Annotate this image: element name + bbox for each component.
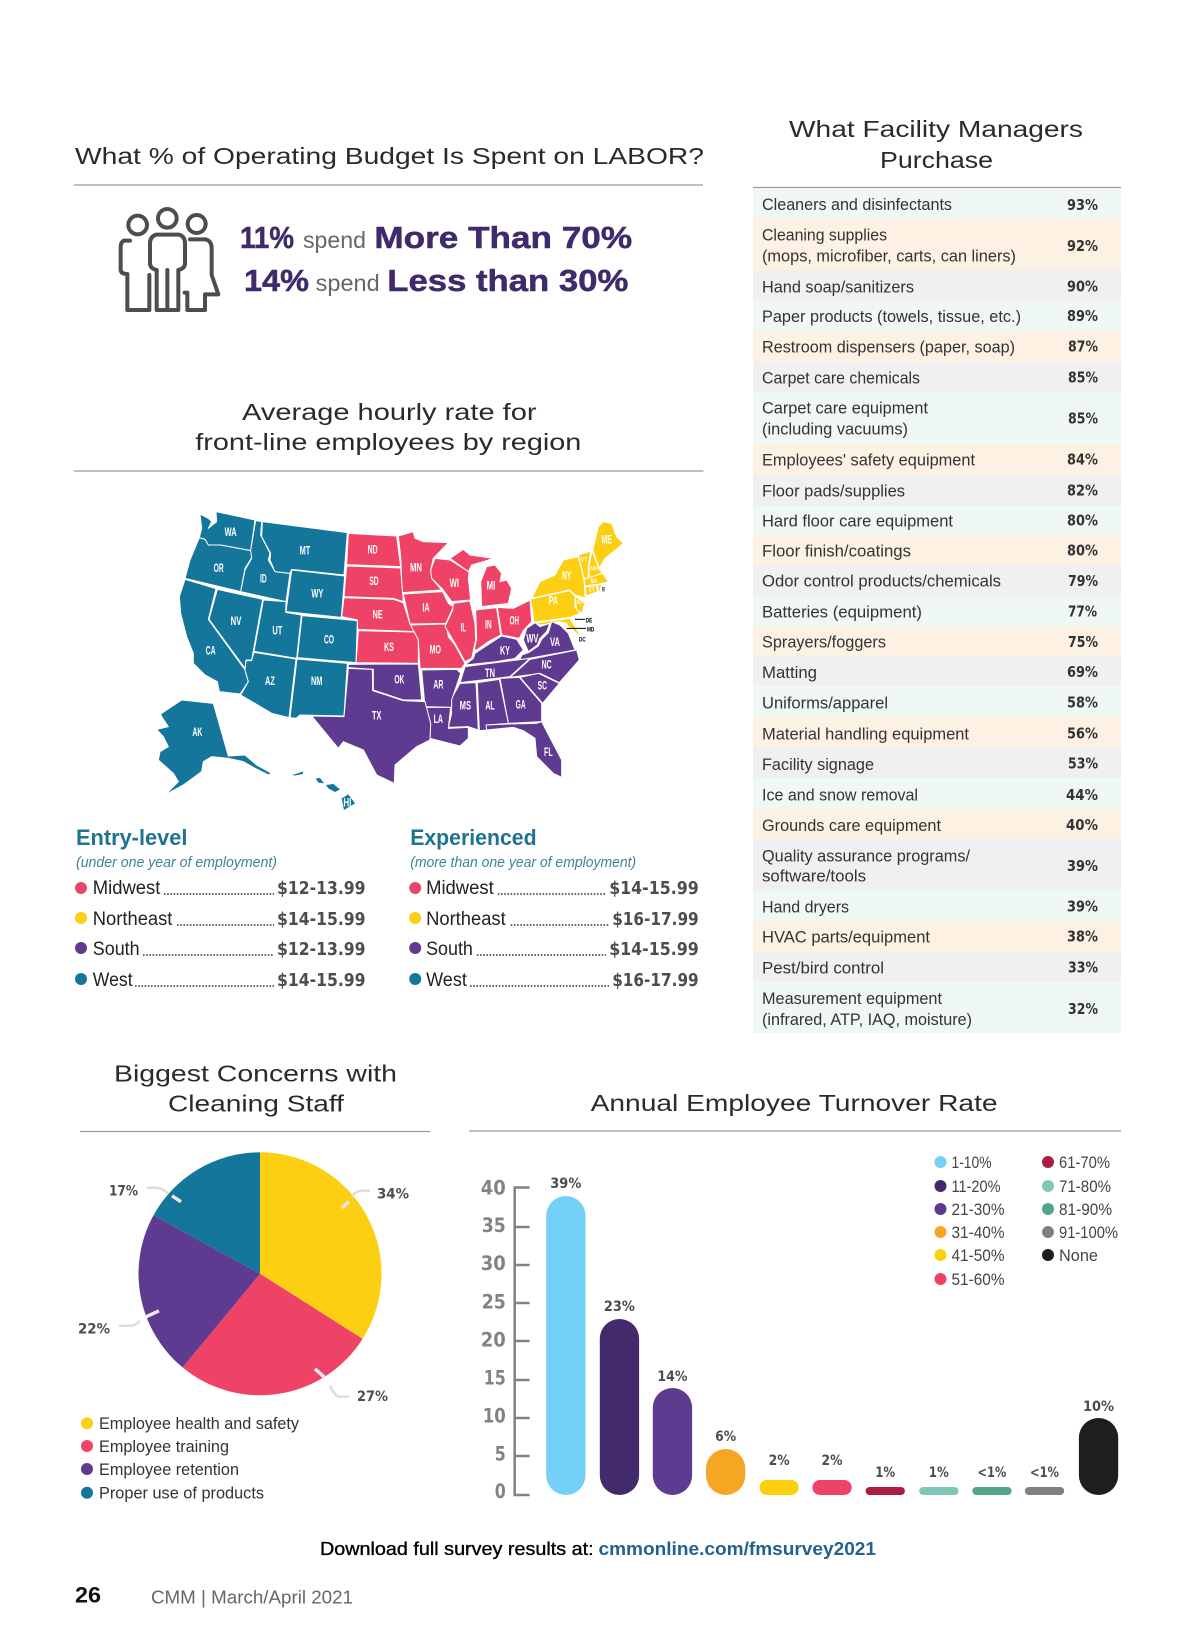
legend: turnover: 71-80%	[1059, 1177, 1111, 1196]
panel: experienced pay: $16-17.99	[612, 909, 699, 930]
download line: Download full survey results at:	[320, 1539, 594, 1559]
row: odor control: Odor control products/chemicals	[762, 572, 1001, 590]
download line	[320, 1539, 876, 1559]
state abbreviations: KS	[384, 640, 394, 654]
row: carpet chemicals: Carpet care chemicals	[762, 370, 920, 388]
row: quality assurance	[753, 839, 1121, 891]
bar: 11-20 percent: 23%	[604, 1299, 635, 1315]
state abbreviations: OH	[510, 613, 519, 627]
row: odor control	[753, 565, 1121, 596]
state abbreviations: GA	[516, 698, 526, 712]
state abbreviations: TX	[372, 708, 381, 722]
callout: 17 percent: 17%	[109, 1183, 138, 1199]
pie chart: concerns	[78, 1152, 409, 1405]
row: carpet equipment: 85%	[1068, 410, 1098, 428]
state abbreviations: CA	[206, 643, 216, 657]
legend: turnover: 41-50%	[952, 1246, 1004, 1265]
state abbreviations: NY	[562, 568, 571, 582]
panel: entry-level pay: South	[93, 939, 140, 960]
legend: turnover: None	[1059, 1246, 1098, 1265]
row: cleaners	[753, 188, 1121, 218]
row: matting	[753, 656, 1121, 686]
panel: experienced pay: South	[426, 939, 473, 960]
row: carpet equipment: Carpet care equipment	[762, 400, 928, 418]
row: batteries	[753, 596, 1121, 626]
row: floor finish	[753, 535, 1121, 565]
state abbreviations: VT	[581, 556, 587, 563]
row: sprayers: 75%	[1068, 633, 1098, 651]
mid-Atlantic callouts	[567, 587, 605, 644]
state abbreviations: NC	[542, 658, 552, 672]
state abbreviations: TN	[485, 666, 495, 680]
state abbreviations: WV	[526, 632, 538, 646]
y axis: 5	[495, 1442, 506, 1466]
heading: labor budget: What % of Operating Budget Is Spent on LABOR?	[75, 143, 704, 169]
panel: experienced pay: $14-15.99	[609, 878, 699, 899]
state abbreviations: ND	[368, 543, 378, 557]
row: cleaning supplies	[753, 218, 1121, 270]
region: Midwest	[342, 532, 532, 668]
row: hand dryers: 39%	[1067, 898, 1098, 916]
state abbreviations: NJ	[577, 599, 582, 606]
row: uniforms	[753, 686, 1121, 717]
row: ice and snow	[753, 778, 1121, 809]
state abbreviations: IA	[422, 601, 430, 615]
row: sprayers: Sprayers/foggers	[762, 634, 886, 652]
row: signage	[753, 747, 1121, 778]
state abbreviations: MT	[300, 543, 311, 557]
row: carpet equipment: (including vacuums)	[762, 420, 908, 438]
bar: 81-90 percent	[972, 1465, 1012, 1495]
row: cleaners: Cleaners and disinfectants	[762, 196, 952, 214]
row: hand soap: 90%	[1067, 278, 1098, 296]
y axis: 10	[483, 1404, 506, 1428]
heading: what facility managers purchase: Purchase	[880, 147, 993, 173]
row: quality assurance: Quality assurance programs/	[762, 848, 970, 866]
row: hard floor: Hard floor care equipment	[762, 512, 953, 530]
row: matting: 69%	[1067, 663, 1098, 681]
row: grounds care: 40%	[1066, 816, 1098, 834]
state abbreviations: WA	[225, 525, 237, 539]
y axis: 0	[495, 1480, 506, 1503]
legend: turnover: 11-20%	[952, 1177, 1000, 1196]
row: cleaners: 93%	[1067, 196, 1098, 214]
row: signage: 53%	[1068, 754, 1098, 772]
callout: 22 percent	[78, 1311, 159, 1337]
row: pest control: Pest/bird control	[762, 960, 884, 978]
panel: experienced pay: Experienced	[410, 825, 537, 850]
heading: average hourly rate: Average hourly rate for	[242, 399, 537, 425]
panel: entry-level pay: (under one year of employment)	[76, 855, 277, 871]
region: Northeast	[531, 522, 623, 635]
region: West	[157, 512, 357, 810]
legend: concerns: Employee health and safety	[99, 1414, 299, 1433]
bar: 21-30 percent	[653, 1369, 692, 1495]
row: hard floor: 80%	[1067, 512, 1098, 530]
row: signage: Facility signage	[762, 756, 874, 774]
state abbreviations: PA	[549, 593, 558, 607]
heading: biggest concerns: Biggest Concerns with	[114, 1060, 397, 1086]
state abbreviations: AR	[433, 677, 444, 691]
callout: 27 percent	[315, 1369, 388, 1405]
row: hand dryers	[753, 891, 1121, 921]
bar: 91-100 percent: <1%	[1030, 1465, 1059, 1481]
callout: 34 percent: 34%	[377, 1186, 409, 1202]
state abbreviations: LA	[434, 712, 443, 726]
row: hand dryers: Hand dryers	[762, 898, 849, 916]
row: floor finish: 80%	[1067, 542, 1098, 560]
callout: 27 percent: 27%	[357, 1389, 388, 1405]
row: batteries: 77%	[1068, 602, 1097, 620]
legend: concerns: Proper use of products	[99, 1484, 264, 1502]
row: ice and snow: 44%	[1066, 786, 1098, 804]
state abbreviations: VA	[550, 635, 560, 649]
panel: entry-level pay: Entry-level	[76, 825, 187, 850]
row: carpet equipment	[753, 393, 1121, 444]
bar: 61-70 percent	[866, 1465, 905, 1495]
row: HVAC: 38%	[1067, 928, 1098, 946]
heading: biggest concerns	[80, 1060, 430, 1132]
panel: entry-level pay: West	[93, 970, 133, 991]
state abbreviations: UT	[272, 623, 283, 637]
state abbreviations: NH	[590, 566, 598, 573]
panel: experienced pay: Midwest	[426, 878, 494, 899]
state abbreviations: HI	[343, 796, 351, 810]
state abbreviations: FL	[544, 745, 553, 759]
state abbreviations: IL	[461, 621, 466, 635]
row: odor control: 79%	[1068, 572, 1098, 590]
panel: entry-level pay: $12-13.99	[277, 878, 366, 899]
legend: turnover: 91-100%	[1059, 1223, 1118, 1242]
row: restroom dispensers: Restroom dispensers (paper, soap)	[762, 338, 1015, 356]
state abbreviations	[192, 525, 612, 810]
stat: less than 30 percent	[244, 263, 628, 298]
map: US states by region	[157, 512, 623, 810]
state abbreviations: MI	[487, 578, 495, 592]
bar: 51-60 percent	[812, 1453, 852, 1495]
bar: 91-100 percent	[1025, 1465, 1064, 1495]
mid-Atlantic callouts: DE	[586, 617, 592, 624]
row: restroom dispensers: 87%	[1068, 338, 1098, 356]
map: US states by region: RI	[602, 587, 605, 594]
row: safety equipment	[753, 444, 1121, 475]
heading: annual turnover: Annual Employee Turnover Rate	[591, 1090, 998, 1116]
bar: 11-20 percent	[600, 1299, 639, 1495]
row: measurement: (infrared, ATP, IAQ, moisture)	[762, 1011, 972, 1029]
stat: more than 70 percent: 11%	[240, 220, 294, 255]
bar: 81-90 percent: <1%	[977, 1465, 1007, 1481]
panel: entry-level pay: $14-15.99	[277, 909, 366, 930]
row: matting: Matting	[762, 664, 817, 682]
state abbreviations: SC	[538, 678, 547, 692]
panel: entry-level pay: Midwest	[93, 878, 161, 899]
panel: experienced pay: $14-15.99	[609, 939, 699, 960]
stat: more than 70 percent: More Than 70%	[374, 220, 632, 255]
row: quality assurance: software/tools	[762, 868, 866, 886]
legend: turnover: 21-30%	[952, 1200, 1004, 1219]
y axis: 35	[482, 1214, 506, 1237]
download line: cmmonline.com/fmsurvey2021	[598, 1539, 876, 1559]
mid-Atlantic callouts: DC	[579, 637, 586, 644]
row: hard floor	[753, 506, 1121, 535]
stat: less than 30 percent: 14%	[244, 263, 309, 298]
state abbreviations: SD	[369, 574, 379, 588]
bar: 71-80 percent	[919, 1465, 958, 1495]
legend: turnover: 31-40%	[952, 1223, 1004, 1242]
row: batteries: Batteries (equipment)	[762, 604, 922, 622]
row: uniforms: Uniforms/apparel	[762, 694, 888, 712]
bar: 31-40 percent	[706, 1429, 745, 1495]
state abbreviations: ME	[601, 532, 612, 546]
heading: average hourly rate	[74, 399, 704, 471]
panel: entry-level pay	[75, 825, 366, 991]
footer: publication: CMM | March/April 2021	[151, 1588, 353, 1608]
bar: 41-50 percent	[760, 1453, 799, 1495]
row: floor finish: Floor finish/coatings	[762, 542, 911, 560]
state abbreviations: KY	[500, 643, 510, 657]
panel: purchases table	[753, 188, 1121, 1033]
state abbreviations: NM	[311, 674, 322, 688]
state abbreviations: NE	[373, 607, 383, 621]
row: HVAC: HVAC parts/equipment	[762, 928, 930, 946]
row: cleaning supplies: 92%	[1067, 237, 1098, 255]
bar: 41-50 percent: 2%	[769, 1453, 790, 1469]
heading: biggest concerns: Cleaning Staff	[168, 1090, 345, 1116]
heading: what facility managers purchase	[753, 116, 1121, 188]
y axis: 40	[481, 1176, 506, 1200]
legend: concerns: Employee retention	[99, 1460, 239, 1479]
state abbreviations: MA	[591, 578, 598, 585]
row: grounds care	[753, 809, 1121, 839]
panel: experienced pay: $16-17.99	[612, 970, 699, 991]
state abbreviations: NV	[231, 614, 241, 628]
bar chart: turnover	[481, 1176, 1118, 1503]
bar: 1-10 percent	[546, 1176, 586, 1495]
region: South	[312, 622, 579, 783]
row: measurement	[753, 982, 1121, 1033]
stat: less than 30 percent: Less than 30%	[387, 263, 628, 298]
row: safety equipment: Employees' safety equipment	[762, 452, 975, 470]
row: pest control: 33%	[1068, 958, 1098, 976]
state abbreviations: AZ	[265, 674, 275, 688]
panel: experienced pay: Northeast	[426, 909, 506, 930]
state abbreviations: CO	[324, 632, 334, 646]
row: carpet chemicals: 85%	[1068, 368, 1098, 386]
state abbreviations: OR	[214, 561, 224, 575]
callout: 22 percent: 22%	[78, 1321, 110, 1337]
row: material handling: Material handling equipment	[762, 726, 969, 744]
legend: concerns: Employee training	[99, 1437, 229, 1456]
bar: 1-10 percent: 39%	[550, 1176, 582, 1192]
row: safety equipment: 84%	[1067, 450, 1098, 468]
legend: turnover: 1-10%	[952, 1153, 992, 1172]
row: uniforms: 58%	[1067, 694, 1098, 712]
state abbreviations: IN	[485, 617, 492, 631]
callout: 17 percent	[109, 1183, 181, 1202]
state abbreviations: CT	[589, 587, 595, 594]
state abbreviations: MS	[460, 698, 471, 712]
state abbreviations: AL	[485, 698, 495, 712]
state abbreviations: WY	[311, 587, 323, 601]
state abbreviations: OK	[394, 672, 405, 686]
row: hand soap	[753, 270, 1121, 301]
row: floor pads: 82%	[1067, 482, 1098, 500]
panel: entry-level pay: Northeast	[93, 909, 173, 930]
heading: what facility managers purchase: What Facility Managers	[789, 116, 1083, 142]
bar: none: 10%	[1083, 1399, 1114, 1415]
panel: experienced pay: (more than one year of employment)	[410, 855, 636, 871]
y axis: 25	[482, 1290, 506, 1314]
y axis: 30	[481, 1252, 506, 1275]
row: material handling	[753, 717, 1121, 747]
row: HVAC	[753, 921, 1121, 952]
row: paper products: Paper products (towels, tissue, etc.)	[762, 308, 1021, 326]
stat: more than 70 percent	[240, 220, 632, 255]
state abbreviations: ID	[260, 572, 267, 586]
bar: 31-40 percent: 6%	[715, 1429, 736, 1445]
row: floor pads: Floor pads/supplies	[762, 482, 905, 500]
heading: average hourly rate: front-line employees by region	[195, 429, 581, 455]
row: ice and snow: Ice and snow removal	[762, 786, 918, 804]
state abbreviations: MO	[430, 642, 441, 656]
callout: 34 percent	[342, 1186, 409, 1208]
row: floor pads	[753, 475, 1121, 506]
legend: turnover: 61-70%	[1059, 1153, 1110, 1172]
panel: entry-level pay: $14-15.99	[277, 970, 366, 991]
row: cleaning supplies: (mops, microfiber, carts, can liners)	[762, 248, 1016, 266]
row: paper products: 89%	[1067, 307, 1098, 325]
mid-Atlantic callouts: MD	[587, 626, 595, 633]
row: restroom dispensers	[753, 331, 1121, 362]
row: grounds care: Grounds care equipment	[762, 817, 941, 835]
panel: entry-level pay: $12-13.99	[277, 939, 366, 960]
bar: 61-70 percent: 1%	[875, 1465, 896, 1481]
page number: 26	[75, 1582, 101, 1608]
row: measurement: Measurement equipment	[762, 990, 942, 1008]
legend: turnover: 51-60%	[952, 1270, 1004, 1289]
row: quality assurance: 39%	[1067, 857, 1098, 875]
row: pest control	[753, 952, 1121, 982]
y axis: 20	[481, 1328, 506, 1352]
bar: 71-80 percent: 1%	[929, 1465, 949, 1481]
stat: less than 30 percent: spend	[316, 270, 380, 296]
row: sprayers	[753, 626, 1121, 656]
state abbreviations: MN	[410, 561, 422, 575]
bar: 51-60 percent: 2%	[822, 1453, 843, 1469]
panel: experienced pay	[409, 825, 699, 991]
state abbreviations: AK	[192, 725, 203, 739]
panel: experienced pay: West	[426, 970, 468, 991]
legend: concerns	[81, 1414, 299, 1502]
row: carpet chemicals	[753, 362, 1121, 393]
bar: none	[1079, 1399, 1118, 1495]
row: cleaning supplies: Cleaning supplies	[762, 226, 887, 244]
y axis	[481, 1176, 530, 1503]
stat: more than 70 percent: spend	[303, 227, 366, 253]
row: measurement: 32%	[1068, 1000, 1098, 1018]
row: paper products	[753, 301, 1121, 331]
icon: group of three people	[121, 209, 218, 310]
legend: turnover	[934, 1153, 1118, 1289]
bar: 21-30 percent: 14%	[657, 1369, 688, 1385]
row: hand soap: Hand soap/sanitizers	[762, 278, 914, 296]
row: material handling: 56%	[1067, 724, 1098, 742]
state abbreviations: WI	[450, 576, 459, 590]
legend: turnover: 81-90%	[1059, 1200, 1112, 1219]
y axis: 15	[484, 1366, 506, 1390]
